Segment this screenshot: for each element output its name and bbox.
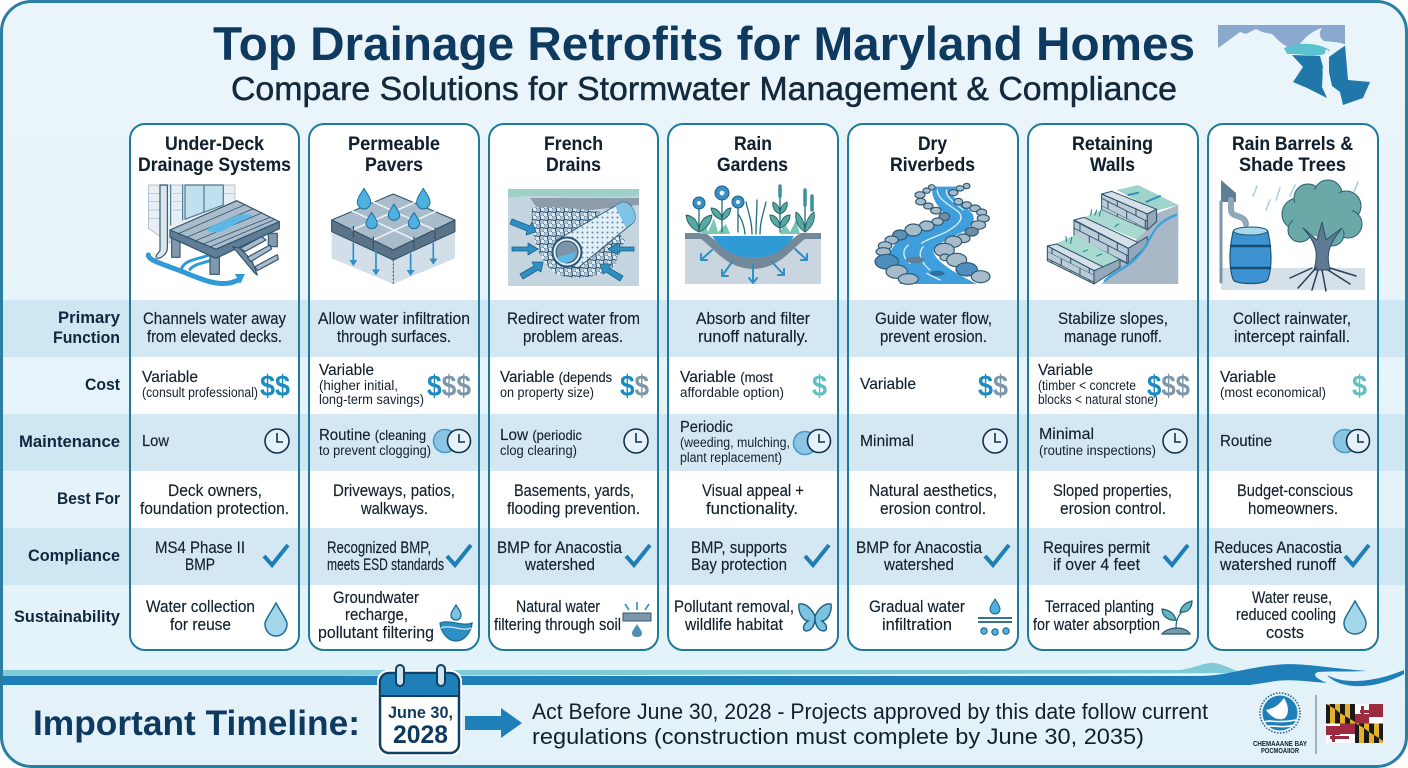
heading: French — [544, 133, 603, 155]
text: cost: Variable — [860, 376, 916, 393]
arrow to notice — [465, 708, 522, 738]
row label: Maintenance: Maintenance — [19, 432, 120, 451]
panel: Rain Gardens — [668, 124, 838, 650]
text: cost: blocks < natural stone) — [1038, 392, 1158, 407]
text: cost: Variable (most — [680, 369, 773, 386]
row label: Primary Function: Function — [53, 328, 120, 347]
icon: double clock — [794, 430, 830, 454]
text: best for: walkways. — [360, 500, 428, 518]
text: sustainability: Terraced planting — [1045, 598, 1154, 616]
text: compliance — [155, 539, 245, 574]
text: compliance: watershed runoff — [1219, 556, 1336, 574]
text: compliance: Reduces Anacostia — [1214, 539, 1343, 557]
text: best for: Deck owners, — [168, 482, 262, 500]
text: cost: Variable (depends — [500, 369, 612, 386]
text: compliance — [497, 539, 623, 574]
text: sustainability: recharge, — [345, 606, 408, 624]
text: maintenance: (routine inspections) — [1039, 443, 1156, 458]
text: function — [696, 310, 810, 346]
row label: Primary Function: Primary — [58, 308, 121, 327]
row label: Compliance: Compliance — [28, 546, 120, 565]
heading: Shade Trees — [1239, 154, 1346, 176]
heading: Under-Deck — [165, 133, 264, 155]
text: sustainability: Water reuse, — [1252, 589, 1332, 607]
text: best for: erosion control. — [880, 500, 986, 518]
text: sustainability: Pollutant removal, — [674, 598, 794, 616]
text: maintenance: Routine — [1220, 433, 1272, 450]
icon: water drop — [1344, 601, 1366, 634]
text: compliance: Recognized BMP, — [327, 539, 431, 557]
text: function: problem areas. — [523, 328, 623, 346]
heading: Retaining — [1072, 133, 1153, 155]
text: best for: flooding prevention. — [507, 500, 640, 518]
text: function: Redirect water from — [507, 310, 640, 328]
text: maintenance: Routine (cleaning — [319, 427, 426, 444]
text: compliance: BMP — [185, 556, 215, 574]
icon: double clock — [1334, 430, 1370, 452]
row label: Cost: Cost — [85, 375, 120, 394]
text: function: through surfaces. — [337, 328, 451, 346]
illustration: retaining wall — [1047, 185, 1178, 284]
text: compliance — [1214, 539, 1343, 574]
text: cost: Variable — [1038, 362, 1093, 379]
heading: Walls — [1090, 154, 1135, 176]
text: compliance — [327, 539, 444, 574]
icon: calendar: June 30, — [388, 703, 453, 722]
icon: groundwater bowl — [440, 605, 472, 641]
text: compliance: Requires permit — [1043, 539, 1150, 557]
icon: water drop — [265, 603, 287, 636]
icon: sprout — [1162, 601, 1192, 634]
text: sustainability: costs — [1266, 624, 1304, 642]
icon: cost $: $ — [812, 370, 827, 403]
text: best for — [140, 482, 289, 518]
text: sustainability — [1236, 589, 1336, 642]
icon: cost $: $ — [1352, 370, 1367, 403]
icon: infiltration — [978, 599, 1012, 635]
text: cost: affordable option) — [680, 385, 784, 400]
icon: clock — [265, 429, 289, 453]
icon: cost $$$: $$$ — [427, 370, 471, 403]
heading: Drains — [546, 154, 601, 176]
icon: clock — [983, 429, 1007, 453]
text: best for: homeowners. — [1248, 500, 1338, 518]
timeline notice — [532, 699, 1208, 749]
text: function: prevent erosion. — [880, 328, 987, 346]
text: function: Stabilize slopes, — [1058, 310, 1168, 328]
text: sustainability: for reuse — [170, 616, 231, 634]
icon: cost $$: $$ — [620, 370, 649, 403]
icon: calendar — [377, 665, 462, 756]
text: function — [1058, 310, 1168, 346]
text: compliance: BMP, supports — [691, 539, 787, 557]
illustration: rain garden — [685, 186, 821, 284]
text: function: from elevated decks. — [147, 328, 282, 346]
text: best for: Natural aesthetics, — [869, 482, 997, 500]
text: function: Allow water infiltration — [318, 310, 470, 328]
panel: Retaining Walls — [1028, 124, 1198, 650]
text: function: Absorb and filter — [696, 310, 810, 328]
heading: Riverbeds — [890, 154, 975, 176]
text: function: runoff naturally. — [698, 328, 808, 346]
icon: clock — [624, 429, 648, 453]
text: maintenance: Periodic — [680, 419, 733, 436]
text: compliance — [691, 539, 787, 574]
text: cost — [319, 362, 424, 407]
text: cost: (consult professional) — [142, 385, 258, 400]
text: cost: long-term savings) — [319, 392, 424, 407]
text: cost — [1038, 362, 1158, 407]
heading — [1072, 133, 1153, 176]
text: sustainability — [1033, 598, 1160, 634]
icon: butterfly — [799, 604, 831, 631]
text: compliance: BMP for Anacostia — [497, 539, 623, 557]
text: sustainability: infiltration — [882, 616, 952, 634]
illustration: rain barrel and tree — [1221, 180, 1365, 291]
text: maintenance: Low (periodic — [500, 427, 582, 444]
text: best for: Visual appeal + — [702, 482, 804, 500]
icon: Maryland map — [1218, 25, 1370, 105]
text: cost: (most economical) — [1220, 385, 1326, 400]
icon: cost $$: $$ — [260, 370, 290, 403]
title: Top Drainage Retrofits for Maryland Homes — [213, 17, 1195, 70]
text: sustainability — [318, 589, 434, 642]
panel: Under-Deck Drainage Systems — [130, 124, 299, 650]
logo: Chesapeake Bay Foundation: CHEMAAANE BAY — [1253, 739, 1307, 748]
text: cost: Variable — [142, 369, 198, 386]
text: maintenance — [680, 419, 790, 465]
heading: Pavers — [365, 154, 423, 176]
text: maintenance: to prevent clogging) — [319, 443, 431, 458]
text: sustainability: for water absorption — [1033, 616, 1160, 634]
text: function: intercept rainfall. — [1234, 328, 1350, 346]
icon: clock — [1163, 429, 1187, 453]
icon: check — [805, 545, 829, 565]
illustration: french drain pipe — [508, 189, 639, 286]
text: cost — [680, 369, 784, 400]
row label: Sustainability: Sustainability — [14, 607, 121, 626]
text: best for: foundation protection. — [140, 500, 289, 518]
logo: Chesapeake Bay Foundation — [1253, 693, 1307, 755]
heading: Rain — [734, 133, 772, 155]
text: best for: functionality. — [706, 500, 798, 518]
panel: Dry Riverbeds — [848, 124, 1018, 650]
heading: Dry — [918, 133, 947, 155]
icon: check — [1345, 545, 1369, 565]
text: cost — [142, 369, 258, 400]
heading: Permeable — [348, 133, 440, 155]
icon: calendar: 2028 — [393, 721, 448, 749]
text: sustainability: Water collection — [146, 598, 255, 616]
panel: Permeable Pavers — [309, 124, 479, 650]
illustration: pavers — [332, 188, 455, 284]
text: maintenance: plant replacement) — [680, 450, 782, 465]
heading: Drainage Systems — [138, 154, 291, 176]
timeline notice: regulations (construction must complete by June 30, 2035) — [532, 724, 1144, 749]
text: sustainability: Gradual water — [869, 598, 965, 616]
text: function — [318, 310, 470, 346]
text: best for — [1053, 482, 1172, 518]
text: cost — [1220, 369, 1326, 400]
text: maintenance: Low — [142, 433, 169, 450]
text: maintenance: clog clearing) — [500, 443, 577, 458]
text: function: Guide water flow, — [875, 310, 992, 328]
text: cost: Variable — [319, 362, 374, 379]
divider — [1315, 695, 1317, 754]
text: best for — [869, 482, 997, 518]
icon: cost $$: $$ — [978, 370, 1008, 403]
heading — [1232, 133, 1353, 176]
text: function: Channels water away — [143, 310, 287, 328]
timeline heading: Important Timeline: — [33, 704, 360, 743]
illustration: dry riverbed — [875, 183, 990, 284]
text: best for: Sloped properties, — [1053, 482, 1172, 500]
timeline notice: Act Before June 30, 2028 - Projects approved by this date follow current — [532, 699, 1208, 724]
text: function — [507, 310, 640, 346]
icon: Maryland flag — [1326, 704, 1383, 743]
heading: Gardens — [717, 154, 788, 176]
panel: French Drains — [489, 124, 658, 650]
text: function: manage runoff. — [1064, 328, 1162, 346]
text: maintenance — [319, 427, 431, 458]
text: best for — [702, 482, 804, 518]
icon: check — [264, 545, 288, 565]
text: sustainability: reduced cooling — [1236, 606, 1336, 624]
icon: double clock — [434, 430, 470, 452]
text: sustainability: wildlife habitat — [684, 616, 783, 634]
heading: Rain Barrels & — [1232, 133, 1353, 155]
wave divider — [3, 663, 1404, 686]
text: compliance: Bay protection — [691, 556, 787, 574]
icon: check — [985, 545, 1009, 565]
text: function: Collect rainwater, — [1233, 310, 1351, 328]
text: sustainability: Natural water — [516, 598, 600, 616]
text: maintenance — [500, 427, 582, 458]
text: sustainability: filtering through soil — [494, 616, 621, 634]
text: cost: Variable — [1220, 369, 1276, 386]
text: sustainability — [494, 598, 621, 634]
heading — [717, 133, 788, 176]
panel: Rain Barrels & Shade Trees — [1208, 124, 1378, 650]
icon: check — [626, 545, 650, 565]
subtitle: Compare Solutions for Stormwater Management & Compliance — [231, 70, 1177, 107]
text: compliance: meets ESD standards — [327, 556, 444, 574]
text: sustainability — [146, 598, 255, 634]
text: sustainability — [869, 598, 965, 634]
row label: Primary Function — [53, 308, 121, 347]
text: best for — [333, 482, 455, 518]
text: compliance: BMP for Anacostia — [856, 539, 983, 557]
icon: check — [447, 545, 471, 565]
text: cost: (higher initial, — [319, 378, 398, 393]
row shading bands — [3, 300, 1405, 585]
text: best for: Basements, yards, — [514, 482, 634, 500]
text: sustainability: Groundwater — [333, 589, 419, 607]
icon: check — [1164, 545, 1188, 565]
text: sustainability — [674, 598, 794, 634]
text: best for — [507, 482, 640, 518]
row label: Best For: Best For — [57, 489, 120, 508]
text: maintenance: (weeding, mulching, — [680, 435, 790, 450]
text: cost: on property size) — [500, 385, 594, 400]
logo: Chesapeake Bay Foundation: POCMOAIIOR — [1261, 748, 1299, 755]
text: compliance: if over 4 feet — [1053, 556, 1140, 574]
text: compliance: watershed — [883, 556, 954, 574]
heading — [138, 133, 291, 176]
text: function — [875, 310, 992, 346]
icon: cost $$$: $$$ — [1147, 370, 1190, 403]
heading — [890, 133, 975, 176]
text: maintenance: Minimal — [1039, 426, 1094, 443]
text: function — [1233, 310, 1351, 346]
text: function — [143, 310, 287, 346]
text: best for — [1237, 482, 1353, 518]
text: compliance: watershed — [524, 556, 595, 574]
text: cost: (timber < concrete — [1038, 378, 1136, 393]
text: cost — [500, 369, 612, 400]
heading — [544, 133, 603, 176]
text: best for: erosion control. — [1060, 500, 1166, 518]
heading — [348, 133, 440, 176]
text: maintenance: Minimal — [860, 433, 914, 450]
text: sustainability: pollutant filtering — [318, 624, 434, 642]
icon: soil filter — [623, 602, 651, 637]
text: best for: Driveways, patios, — [333, 482, 455, 500]
text: compliance — [856, 539, 983, 574]
text: maintenance — [1039, 426, 1156, 458]
text: compliance: MS4 Phase II — [155, 539, 245, 557]
text: best for: Budget-conscious — [1237, 482, 1353, 500]
text: compliance — [1043, 539, 1150, 574]
illustration: deck — [148, 185, 279, 284]
